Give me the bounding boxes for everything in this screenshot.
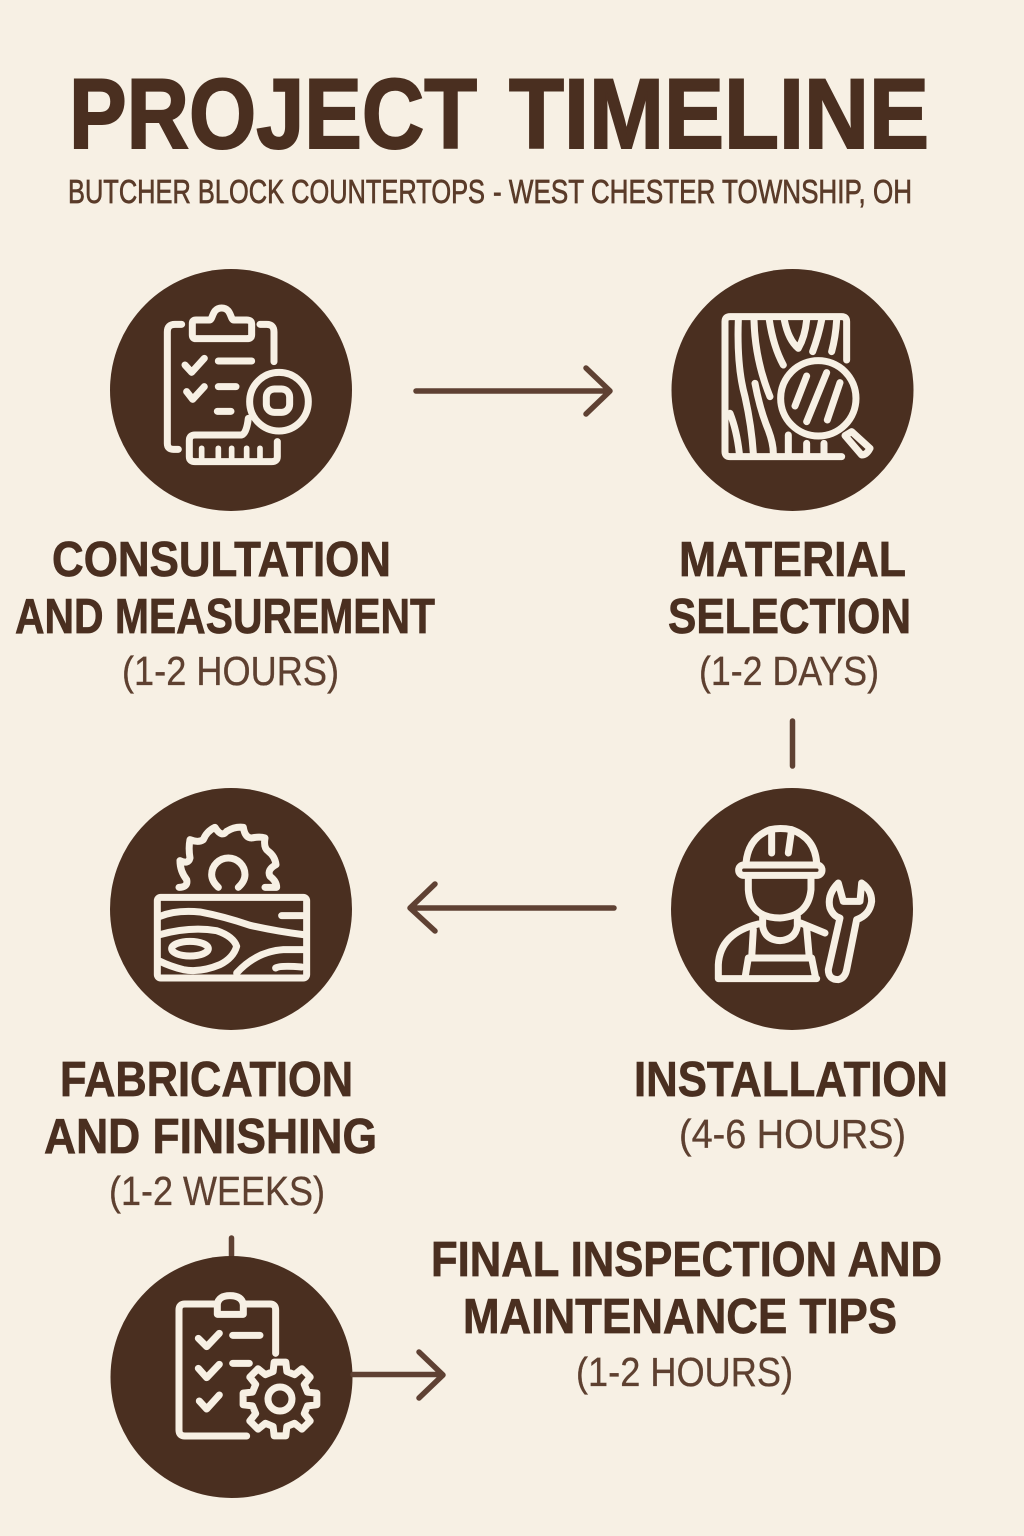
step 2 heading: MATERIAL [679, 533, 906, 587]
icon: worker with wrench [718, 828, 872, 980]
title: PROJECT [69, 58, 477, 169]
step 4 heading line 2: AND FINISHING [44, 1110, 377, 1164]
arrow: step 3 to step 4 [410, 884, 614, 931]
step 2 heading line 2: SELECTION [668, 590, 911, 644]
subtitle [68, 174, 912, 211]
icon: saw blade and wood plank [157, 827, 307, 978]
step 5 circle [110, 1256, 352, 1498]
step 4: fabrication and finishing [44, 788, 377, 1214]
arrow: step 2 connector down [790, 721, 795, 766]
subtitle: BUTCHER BLOCK COUNTERTOPS [68, 174, 485, 211]
step 1: consultation and measurement [15, 269, 435, 694]
subtitle: - WEST CHESTER TOWNSHIP, OH [493, 174, 912, 211]
step 2 duration: (1-2 DAYS) [699, 648, 879, 694]
step 5: final inspection and maintenance tips [110, 1233, 942, 1498]
step 3: installation [634, 788, 948, 1157]
step 1 duration: (1-2 HOURS) [122, 648, 339, 694]
step 3 circle [671, 788, 913, 1030]
step 5 heading: FINAL INSPECTION AND [431, 1233, 942, 1287]
title: TIMELINE [509, 58, 929, 169]
icon: checklist with gear [179, 1296, 317, 1436]
step 2: material selection [668, 269, 914, 694]
step 1 circle [110, 269, 352, 511]
arrow: step 4 connector down [229, 1238, 234, 1258]
step 4 duration: (1-2 WEEKS) [109, 1168, 325, 1214]
step 5 heading line 2: MAINTENANCE TIPS [463, 1290, 897, 1344]
step 3 heading: INSTALLATION [634, 1053, 948, 1107]
step 1 heading: CONSULTATION [52, 533, 391, 587]
step 1 heading line 2: AND MEASUREMENT [15, 590, 435, 644]
step 4 heading: FABRICATION [60, 1053, 353, 1107]
step 3 duration: (4-6 HOURS) [679, 1111, 906, 1157]
arrow: step 1 to step 2 [416, 368, 610, 414]
title [69, 58, 929, 169]
step 4 circle [110, 788, 352, 1030]
icon: wood grain with magnifier [725, 317, 870, 457]
step 5 duration: (1-2 HOURS) [576, 1349, 793, 1395]
step 2 circle [672, 269, 914, 511]
arrow: step 5 to text [353, 1352, 443, 1398]
icon: clipboard with ruler and magnifier [167, 308, 308, 462]
